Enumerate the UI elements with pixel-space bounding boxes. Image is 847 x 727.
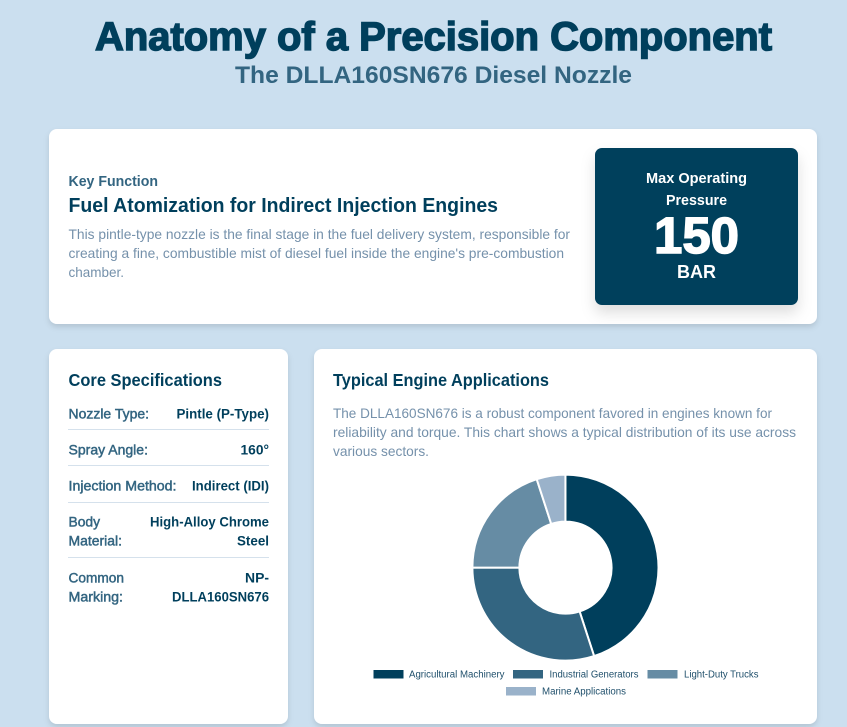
spec row: common marking — [68, 570, 269, 604]
spec row: common marking: DLLA160SN676 — [172, 590, 269, 604]
subtitle: The DLLA160SN676 Diesel Nozzle — [235, 62, 632, 89]
legend: Light-Duty Trucks — [684, 670, 758, 680]
applications heading: Typical Engine Applications — [333, 370, 549, 390]
applications description: The DLLA160SN676 is a robust component favored in engines known for — [333, 405, 772, 421]
spec row: common marking: NP- — [245, 570, 269, 586]
applications description — [333, 405, 796, 459]
callout: max operating pressure: Max Operating — [646, 171, 747, 187]
key function label: Key Function — [68, 173, 158, 190]
spec row: body material: Material: — [68, 534, 122, 548]
applications description: reliability and torque. This chart shows a typical distribution of its use across — [333, 424, 796, 440]
panel: typical engine applications — [314, 349, 817, 724]
spec row: body material — [68, 514, 269, 548]
key function description: creating a fine, combustible mist of diesel fuel inside the engine's pre-combustion — [68, 245, 564, 261]
legend — [374, 670, 758, 698]
legend: Agricultural Machinery — [409, 670, 504, 680]
callout: max operating pressure: BAR — [677, 262, 716, 282]
donut chart — [472, 475, 659, 661]
panel: core specifications — [49, 349, 288, 724]
key function description: chamber. — [68, 264, 124, 280]
spec row: injection method: Injection Method: — [68, 478, 176, 494]
spec row: body material: Steel — [237, 534, 269, 548]
callout: max operating pressure — [595, 148, 798, 305]
spec row: common marking: Common — [68, 570, 124, 586]
spec row: injection method: Indirect (IDI) — [192, 478, 269, 494]
key function description — [68, 226, 570, 280]
key function heading: Fuel Atomization for Indirect Injection Engines — [68, 194, 498, 217]
key function description: This pintle-type nozzle is the final stage in the fuel delivery system, responsible for — [68, 226, 570, 242]
spec row: nozzle type: Nozzle Type: — [68, 406, 149, 422]
spec row: spray angle: 160° — [240, 442, 269, 458]
spec row: body material: Body — [68, 514, 100, 530]
callout: max operating pressure: 150 — [654, 207, 739, 264]
spec row: spray angle — [68, 442, 269, 458]
legend: Industrial Generators — [550, 670, 638, 680]
spec row: nozzle type: Pintle (P-Type) — [176, 406, 269, 422]
core specifications heading: Core Specifications — [68, 370, 222, 390]
spec row: injection method — [68, 478, 269, 494]
callout: max operating pressure: Pressure — [666, 193, 727, 209]
spec row: spray angle: Spray Angle: — [68, 442, 148, 458]
applications description: various sectors. — [333, 443, 429, 459]
title: Anatomy of a Precision Component — [95, 15, 772, 59]
spec row: common marking: Marking: — [68, 590, 123, 604]
spec row: body material: High-Alloy Chrome — [150, 514, 269, 530]
legend: Marine Applications — [542, 686, 626, 698]
panel: key function — [49, 129, 817, 324]
spec row: nozzle type — [68, 406, 269, 422]
